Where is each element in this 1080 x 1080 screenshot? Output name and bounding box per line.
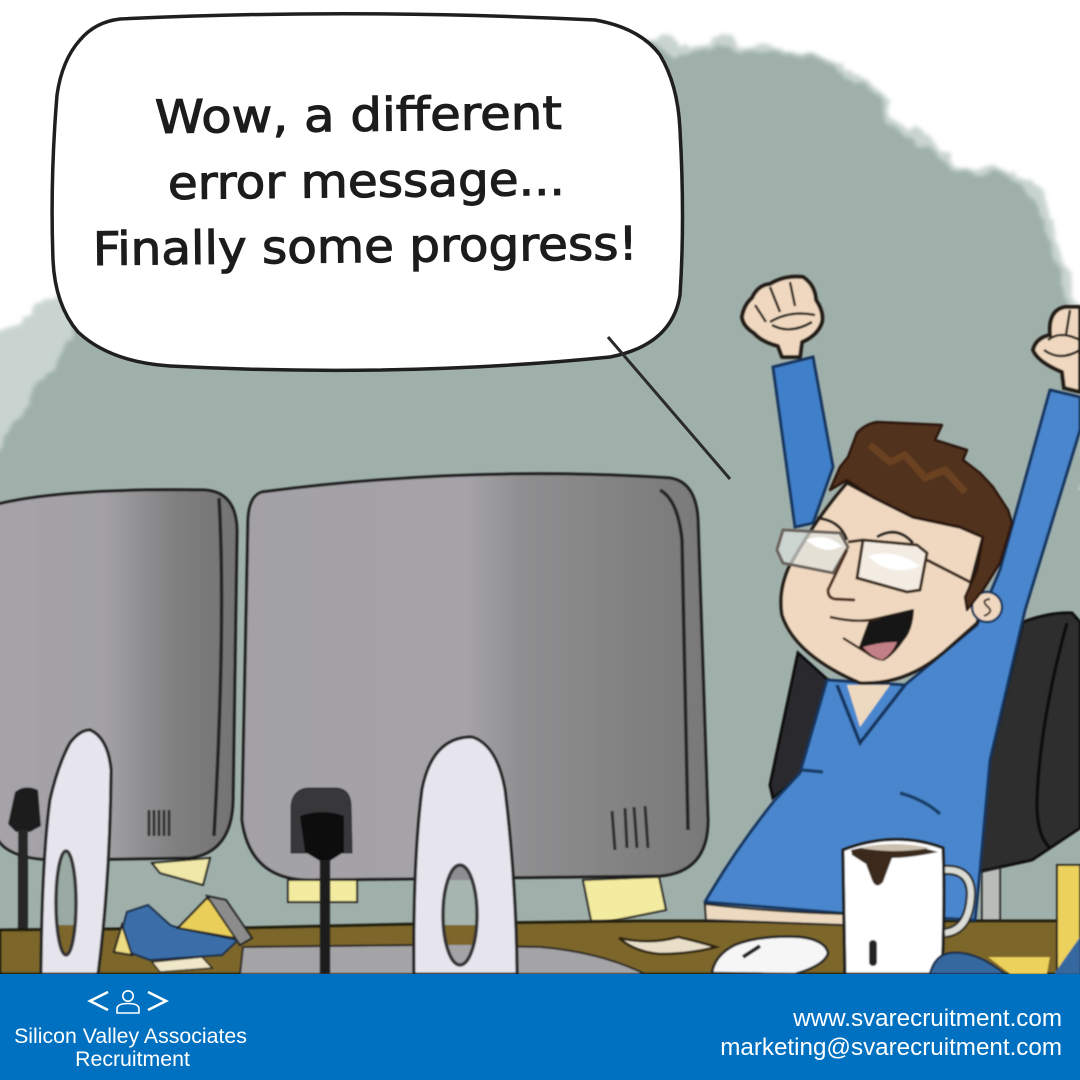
vent lines bbox=[149, 810, 169, 836]
company name: Recruitment bbox=[75, 1047, 190, 1071]
coffee mug bbox=[843, 839, 971, 974]
left monitor bbox=[0, 490, 237, 974]
stand: left monitor bbox=[41, 730, 111, 974]
bubble text: Finally some progress! bbox=[93, 216, 638, 276]
crumpled can bbox=[114, 896, 252, 972]
stand: right monitor bbox=[325, 737, 517, 974]
footer bar bbox=[0, 974, 1080, 1080]
person bbox=[705, 277, 1080, 925]
body and sleeves bbox=[705, 390, 1080, 920]
right monitor bbox=[242, 474, 708, 925]
computer mouse bbox=[712, 937, 828, 974]
head bbox=[781, 483, 983, 683]
bubble tail bbox=[608, 337, 730, 479]
contact details: www.svarecruitment.com bbox=[793, 1005, 1062, 1032]
desk bbox=[0, 921, 1080, 974]
bubble text bbox=[93, 86, 638, 276]
sticky note under right monitor bbox=[583, 877, 666, 925]
bubble text: Wow, a different bbox=[155, 86, 562, 144]
logo icon bbox=[87, 990, 169, 1014]
right fist bbox=[1033, 307, 1080, 392]
contact details: marketing@svarecruitment.com bbox=[720, 1034, 1062, 1061]
crumpled paper on desk bbox=[619, 937, 716, 954]
right side cup and can bbox=[930, 865, 1080, 974]
ear bbox=[972, 592, 1002, 622]
plug and cable bbox=[8, 787, 41, 832]
glasses bbox=[777, 530, 848, 573]
hair bbox=[830, 422, 1012, 610]
chair bbox=[770, 613, 1080, 922]
bubble text: error message... bbox=[168, 152, 565, 210]
company name bbox=[14, 1024, 247, 1071]
vent lines bbox=[612, 806, 648, 850]
company name: Silicon Valley Associates bbox=[14, 1024, 247, 1048]
nose bbox=[828, 550, 855, 600]
keyboard bbox=[240, 945, 645, 974]
sticky note under left monitor bbox=[152, 858, 210, 885]
left fist bbox=[742, 277, 822, 357]
contact details bbox=[720, 1005, 1062, 1061]
plug bbox=[291, 788, 352, 862]
neck bbox=[847, 685, 890, 727]
plug cable bbox=[320, 860, 330, 974]
speech bubble bbox=[52, 14, 730, 479]
left arm bbox=[773, 357, 833, 527]
waist skin bbox=[705, 904, 845, 925]
mouth bbox=[860, 610, 913, 660]
